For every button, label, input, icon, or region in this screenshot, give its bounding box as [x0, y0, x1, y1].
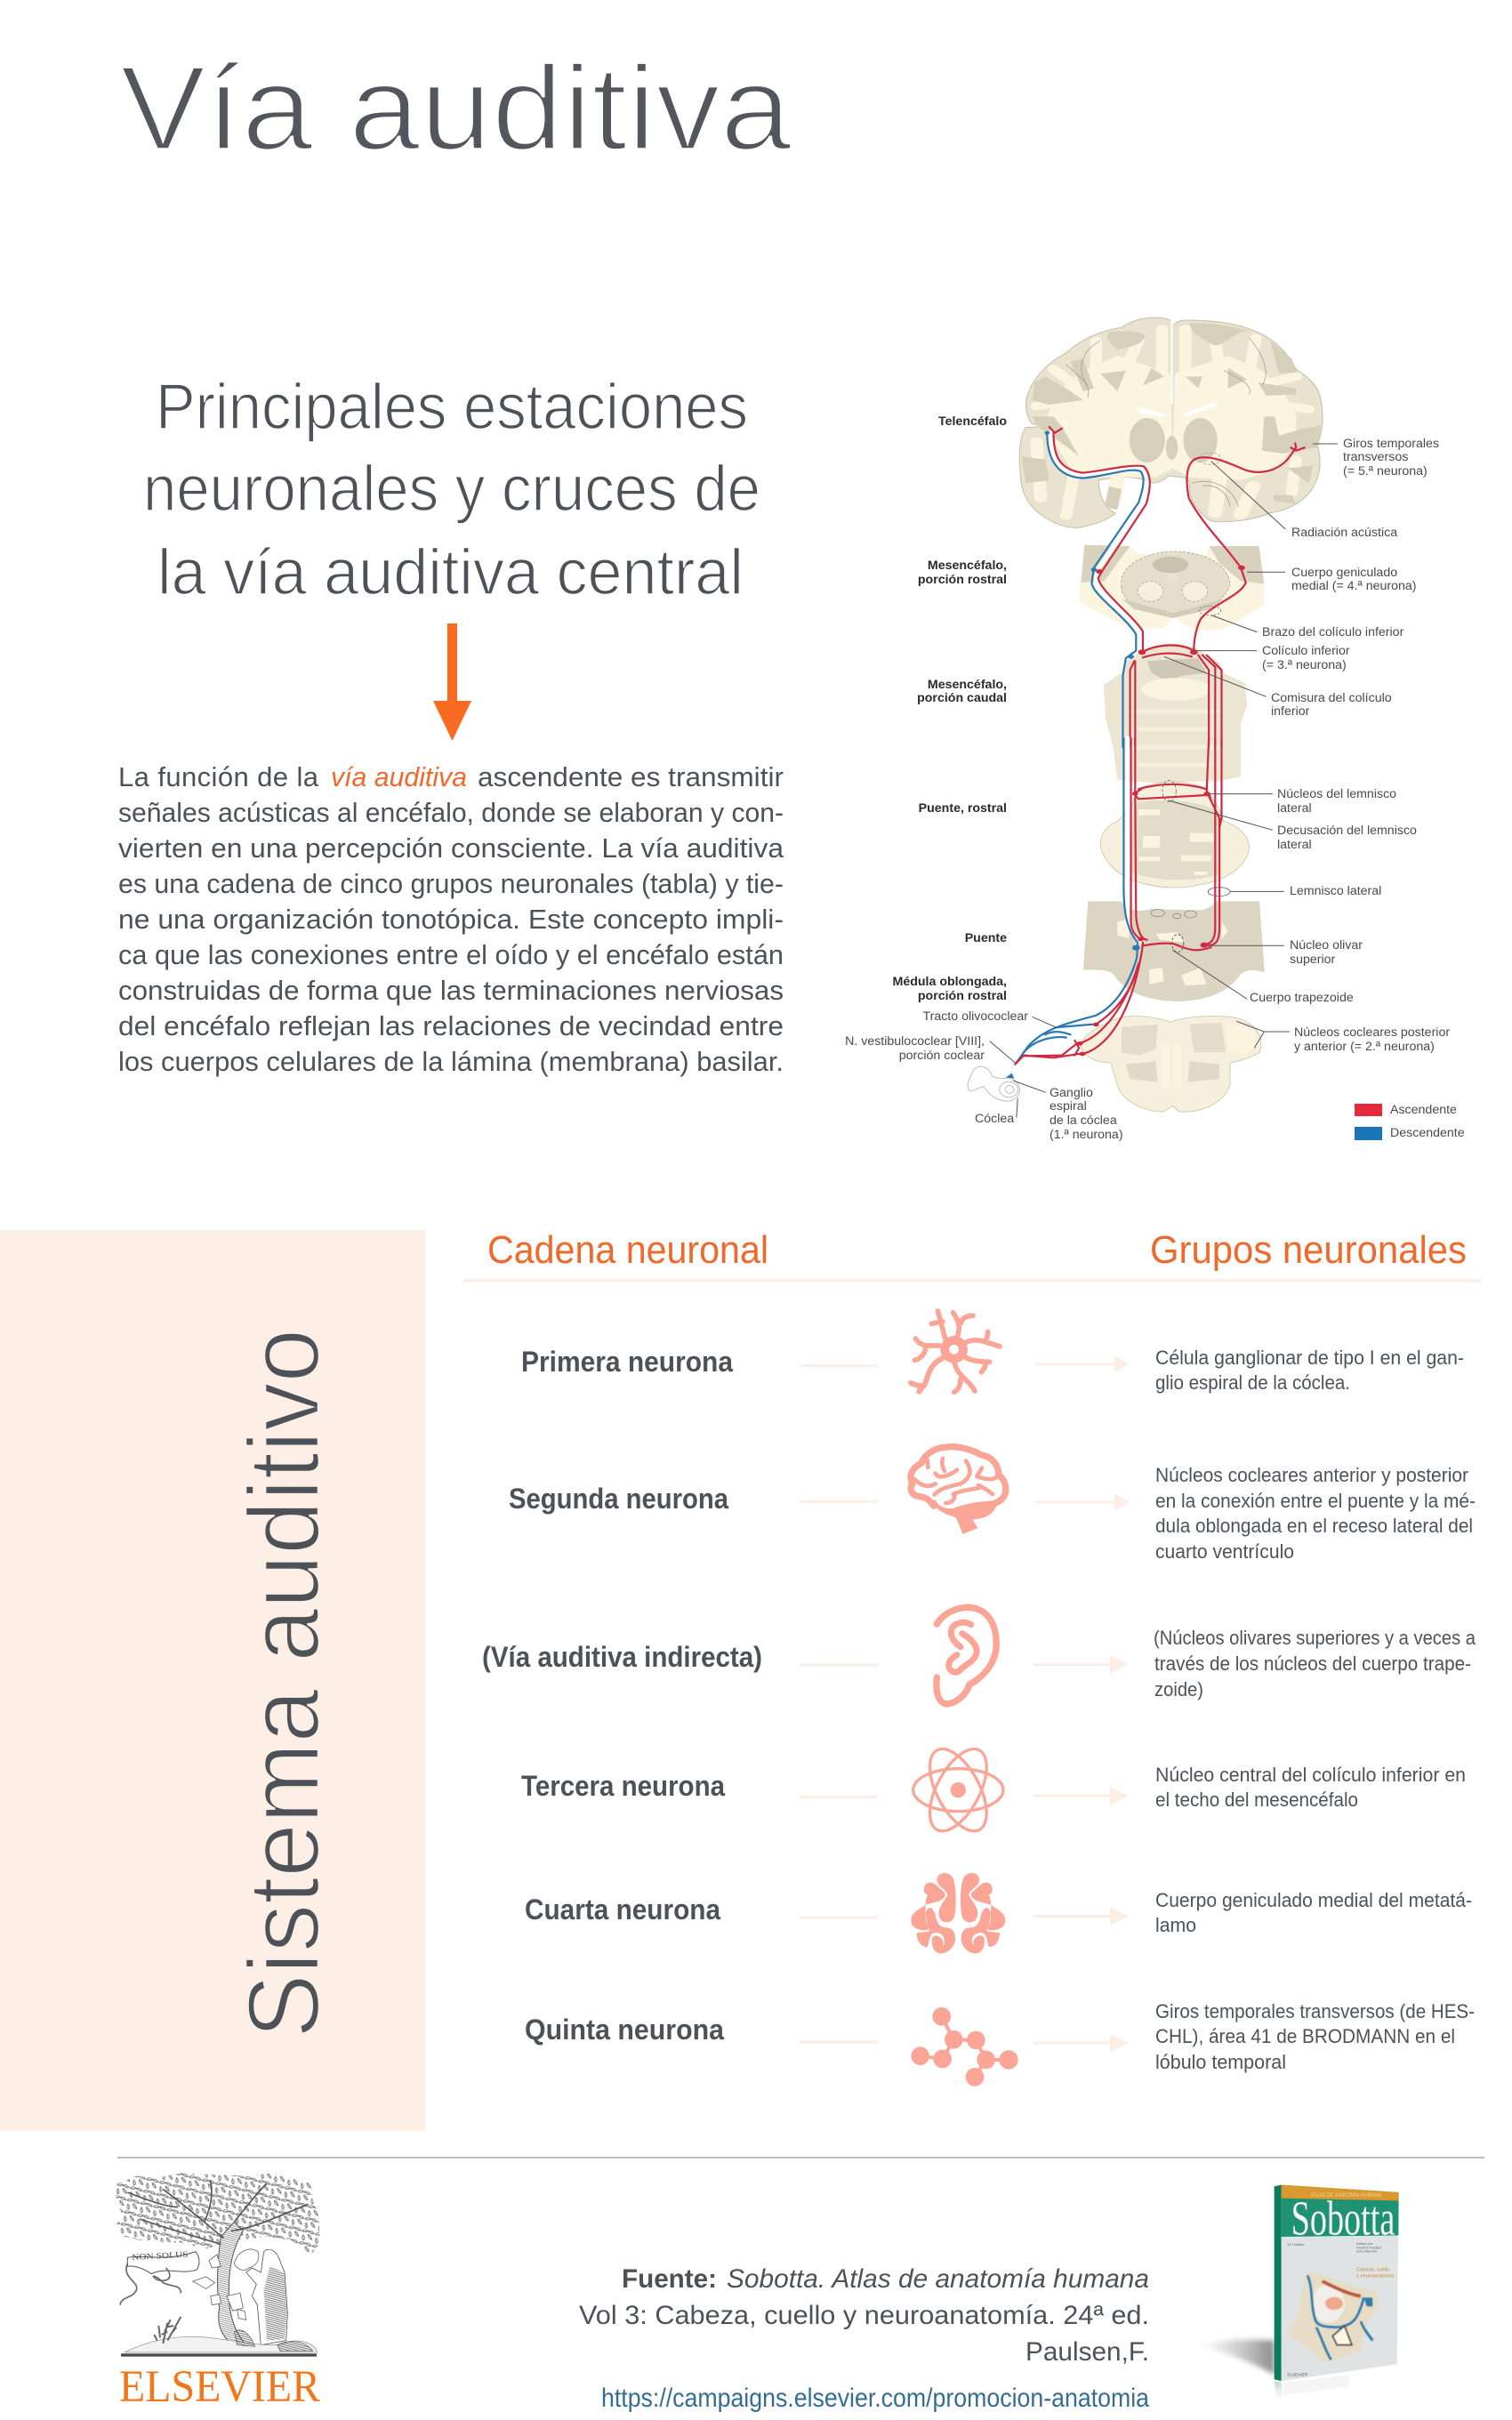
diagram labels: Núcleos del lemnisco — [1277, 787, 1396, 801]
banner: non solus — [120, 2251, 199, 2305]
diagram labels: Giros temporales — [1343, 437, 1439, 451]
diagram labels: Puente — [965, 931, 1007, 945]
diagram labels: medial (= 4.ª neurona) — [1291, 579, 1417, 593]
diagram labels: transversos — [1343, 450, 1408, 464]
heading: principales estaciones — [143, 372, 760, 608]
section: pons — [1083, 901, 1265, 1001]
book: sobotta atlas cover: ELSEVIER — [1287, 2373, 1308, 2377]
man figure — [246, 2249, 287, 2345]
book: sobotta atlas cover: y neuroanatomía — [1356, 2274, 1395, 2279]
text block: intro paragraph: ne una organización tonotópica. Este concepto impli- — [118, 904, 784, 935]
diagram labels: Telencéfalo — [938, 414, 1007, 429]
vertical heading: Sistema auditivo — [228, 1329, 340, 2038]
diagram labels: porción rostral — [918, 573, 1007, 587]
row: cuarta neurona: Cuarta neurona — [525, 1893, 720, 1926]
icon: brain — [911, 1447, 1006, 1534]
table header: grupos neuronales: Grupos neuronales — [1150, 1228, 1467, 1272]
text block: intro paragraph: los cuerpos celulares de la lámina (membrana) basilar. — [118, 1046, 784, 1077]
ground and bush — [125, 2336, 318, 2352]
book: sobotta atlas cover: Sobotta — [1291, 2191, 1395, 2246]
diagram labels: Mesencéfalo, — [928, 678, 1007, 692]
source text — [579, 2264, 1149, 2413]
diagram labels: (= 5.ª neurona) — [1343, 464, 1428, 478]
diagram labels: Núcleos cocleares posterior — [1294, 1025, 1450, 1040]
text block: intro paragraph: es una cadena de cinco grupos neuronales (tabla) y tie- — [118, 868, 784, 899]
row: vía auditiva indirecta: través de los núcleos del cuerpo trape- — [1154, 1652, 1471, 1675]
tree engraving — [114, 2172, 325, 2357]
row: vía auditiva indirecta: (Núcleos olivares superiores y a veces a — [1154, 1627, 1476, 1649]
heading: principales estaciones: la vía auditiva central — [157, 537, 744, 608]
text block: intro paragraph: ascendente es transmitir — [478, 761, 784, 792]
row: primera neurona — [521, 1311, 1464, 1394]
diagram labels — [845, 414, 1450, 1142]
diagram labels: Ganglio — [1050, 1086, 1093, 1100]
text block: intro paragraph: señales acústicas al encéfalo, donde se elaboran y con- — [118, 797, 784, 828]
diagram labels: N. vestibulococlear [VIII], — [845, 1034, 985, 1049]
row: segunda neurona — [509, 1447, 1476, 1563]
text block: intro paragraph: construidas de forma que las terminaciones nerviosas — [118, 975, 784, 1006]
diagram labels: Cuerpo geniculado — [1291, 566, 1397, 580]
diagram labels: Lemnisco lateral — [1290, 884, 1381, 898]
row: tercera neurona: Tercera neurona — [521, 1770, 725, 1802]
diagram labels: espiral — [1050, 1099, 1087, 1114]
row: tercera neurona — [521, 1741, 1466, 1840]
book: sobotta atlas cover — [1198, 2185, 1399, 2404]
row: quinta neurona: Giros temporales transversos (de HES- — [1155, 2000, 1475, 2022]
source text: Fuente: — [622, 2264, 717, 2294]
banner: non solus: NON SOLUS — [132, 2251, 189, 2263]
pathways: lower red and blue tracts — [1006, 738, 1221, 1079]
section: rostral pons — [1100, 780, 1250, 896]
book: sobotta atlas cover: Friedrich Paulsen — [1356, 2246, 1381, 2249]
book: sobotta atlas cover: Cabeza, cuello — [1356, 2267, 1389, 2272]
icon: ear — [937, 1607, 996, 1704]
orbit illustration — [1287, 2273, 1379, 2363]
heading: principales estaciones: neuronales y cruces de — [143, 454, 760, 525]
icon: atom — [913, 1741, 1003, 1840]
panel: sistema auditivo — [0, 1230, 425, 2131]
diagram labels: superior — [1290, 953, 1336, 967]
title: Vía auditiva — [120, 41, 792, 175]
source text: Vol 3: Cabeza, cuello y neuroanatomía. 24ª ed. — [579, 2301, 1149, 2330]
diagram labels: Tracto olivococlear — [922, 1009, 1028, 1024]
row: segunda neurona: Núcleos cocleares anterior y posterior — [1155, 1464, 1468, 1486]
row: cuarta neurona: Cuerpo geniculado medial del metatá- — [1155, 1889, 1472, 1911]
table header: cadena neuronal: Cadena neuronal — [487, 1228, 768, 1272]
row: primera neurona: Primera neurona — [521, 1346, 733, 1378]
row: vía auditiva indirecta: zoide) — [1154, 1678, 1203, 1700]
icon: brain section — [911, 1873, 1005, 1953]
diagram labels: Decusación del lemnisco — [1277, 824, 1417, 838]
leader lines — [990, 444, 1338, 1118]
text block: intro paragraph — [118, 761, 784, 1077]
source text: Sobotta. Atlas de anatomía humana — [727, 2264, 1149, 2294]
row: vía auditiva indirecta: (Vía auditiva indirecta) — [482, 1641, 762, 1673]
book: sobotta atlas cover: Jens Waschke — [1356, 2250, 1378, 2254]
diagram labels: de la cóclea — [1050, 1114, 1117, 1128]
book: sobotta atlas cover: 24.ª edición — [1287, 2243, 1304, 2247]
wordmark: ELSEVIER — [119, 2362, 320, 2412]
arrow: down — [433, 623, 471, 741]
diagram labels: y anterior (= 2.ª neurona) — [1294, 1040, 1435, 1054]
section: caudal midbrain — [1104, 644, 1247, 783]
text block: intro paragraph: del encéfalo reflejan las relaciones de vecindad entre — [118, 1010, 784, 1041]
row: vía auditiva indirecta — [482, 1607, 1476, 1704]
diagram labels: Mesencéfalo, — [928, 559, 1007, 573]
text block: intro paragraph: vierten en una percepción consciente. La vía auditiva — [118, 832, 784, 864]
anatomical diagram: auditory pathway — [845, 318, 1465, 1142]
row: segunda neurona: cuarto ventrículo — [1155, 1540, 1294, 1563]
source text: Paulsen,F. — [1025, 2337, 1149, 2367]
diagram labels: Cuerpo trapezoide — [1250, 991, 1354, 1005]
diagram labels: Cóclea — [975, 1112, 1014, 1126]
text block: intro paragraph: vía auditiva — [331, 761, 467, 792]
row: segunda neurona: Segunda neurona — [509, 1483, 728, 1515]
diagram labels: lateral — [1277, 838, 1312, 852]
row: tercera neurona: Núcleo central del colículo inferior en — [1155, 1764, 1466, 1786]
diagram labels: porción caudal — [917, 691, 1007, 705]
book: sobotta atlas cover: ATLAS DE ANATOMÍA HUMANA — [1310, 2192, 1381, 2199]
text block: intro paragraph: La función de la — [118, 761, 319, 792]
row: primera neurona: Célula ganglionar de tipo I en el gan- — [1155, 1347, 1464, 1369]
logo: elsevier — [114, 2172, 325, 2412]
heading: principales estaciones: Principales estaciones — [156, 372, 748, 443]
section: medulla — [1081, 1016, 1261, 1112]
row: tercera neurona: el techo del mesencéfalo — [1155, 1789, 1358, 1811]
diagram labels: (1.ª neurona) — [1050, 1128, 1123, 1142]
diagram labels: Núcleo olivar — [1290, 938, 1363, 953]
row: primera neurona: glio espiral de la cóclea. — [1155, 1371, 1350, 1394]
diagram labels: Colículo inferior — [1262, 644, 1350, 658]
legend: ascendente / descendente — [1355, 1103, 1465, 1140]
diagram labels: porción coclear — [899, 1049, 985, 1063]
row: quinta neurona: CHL), área 41 de BRODMANN en el — [1155, 2025, 1455, 2047]
legend: ascendente / descendente: Ascendente — [1390, 1103, 1457, 1117]
row: cuarta neurona: lamo — [1155, 1914, 1196, 1936]
cochlea — [968, 1066, 1019, 1101]
diagram labels: Médula oblongada, — [893, 975, 1007, 989]
row: quinta neurona: Quinta neurona — [525, 2014, 724, 2046]
pathways: upper red and blue tracts — [1044, 427, 1305, 747]
trunk and branches — [127, 2181, 309, 2345]
text block: intro paragraph: ca que las conexiones entre el oído y el encéfalo están — [118, 939, 784, 970]
row: segunda neurona: en la conexión entre el puente y la mé- — [1155, 1490, 1476, 1512]
source text: https://campaigns.elsevier.com/promocion-anatomia — [601, 2384, 1149, 2413]
brain section: telencephalon — [1019, 318, 1323, 527]
row: cuarta neurona — [525, 1873, 1472, 1953]
diagram labels: Brazo del colículo inferior — [1262, 625, 1404, 639]
legend: ascendente / descendente: Descendente — [1390, 1126, 1465, 1140]
diagram labels: Puente, rostral — [919, 801, 1007, 816]
book: sobotta atlas cover: Editado por — [1356, 2242, 1373, 2246]
vine leaves — [193, 2249, 259, 2320]
diagram labels: inferior — [1271, 704, 1310, 719]
row: quinta neurona: lóbulo temporal — [1155, 2051, 1286, 2073]
section: rostral midbrain — [1079, 545, 1264, 631]
diagram labels: (= 3.ª neurona) — [1262, 658, 1347, 672]
diagram labels: lateral — [1277, 801, 1312, 816]
icon: molecule — [911, 2007, 1018, 2086]
diagram labels: porción rostral — [918, 989, 1007, 1003]
row: quinta neurona — [525, 2000, 1475, 2086]
diagram labels: Comisura del colículo — [1271, 691, 1392, 705]
row: segunda neurona: dula oblongada en el receso lateral del — [1155, 1515, 1473, 1537]
diagram labels: Radiación acústica — [1291, 526, 1397, 540]
icon: neuron — [911, 1311, 1000, 1392]
